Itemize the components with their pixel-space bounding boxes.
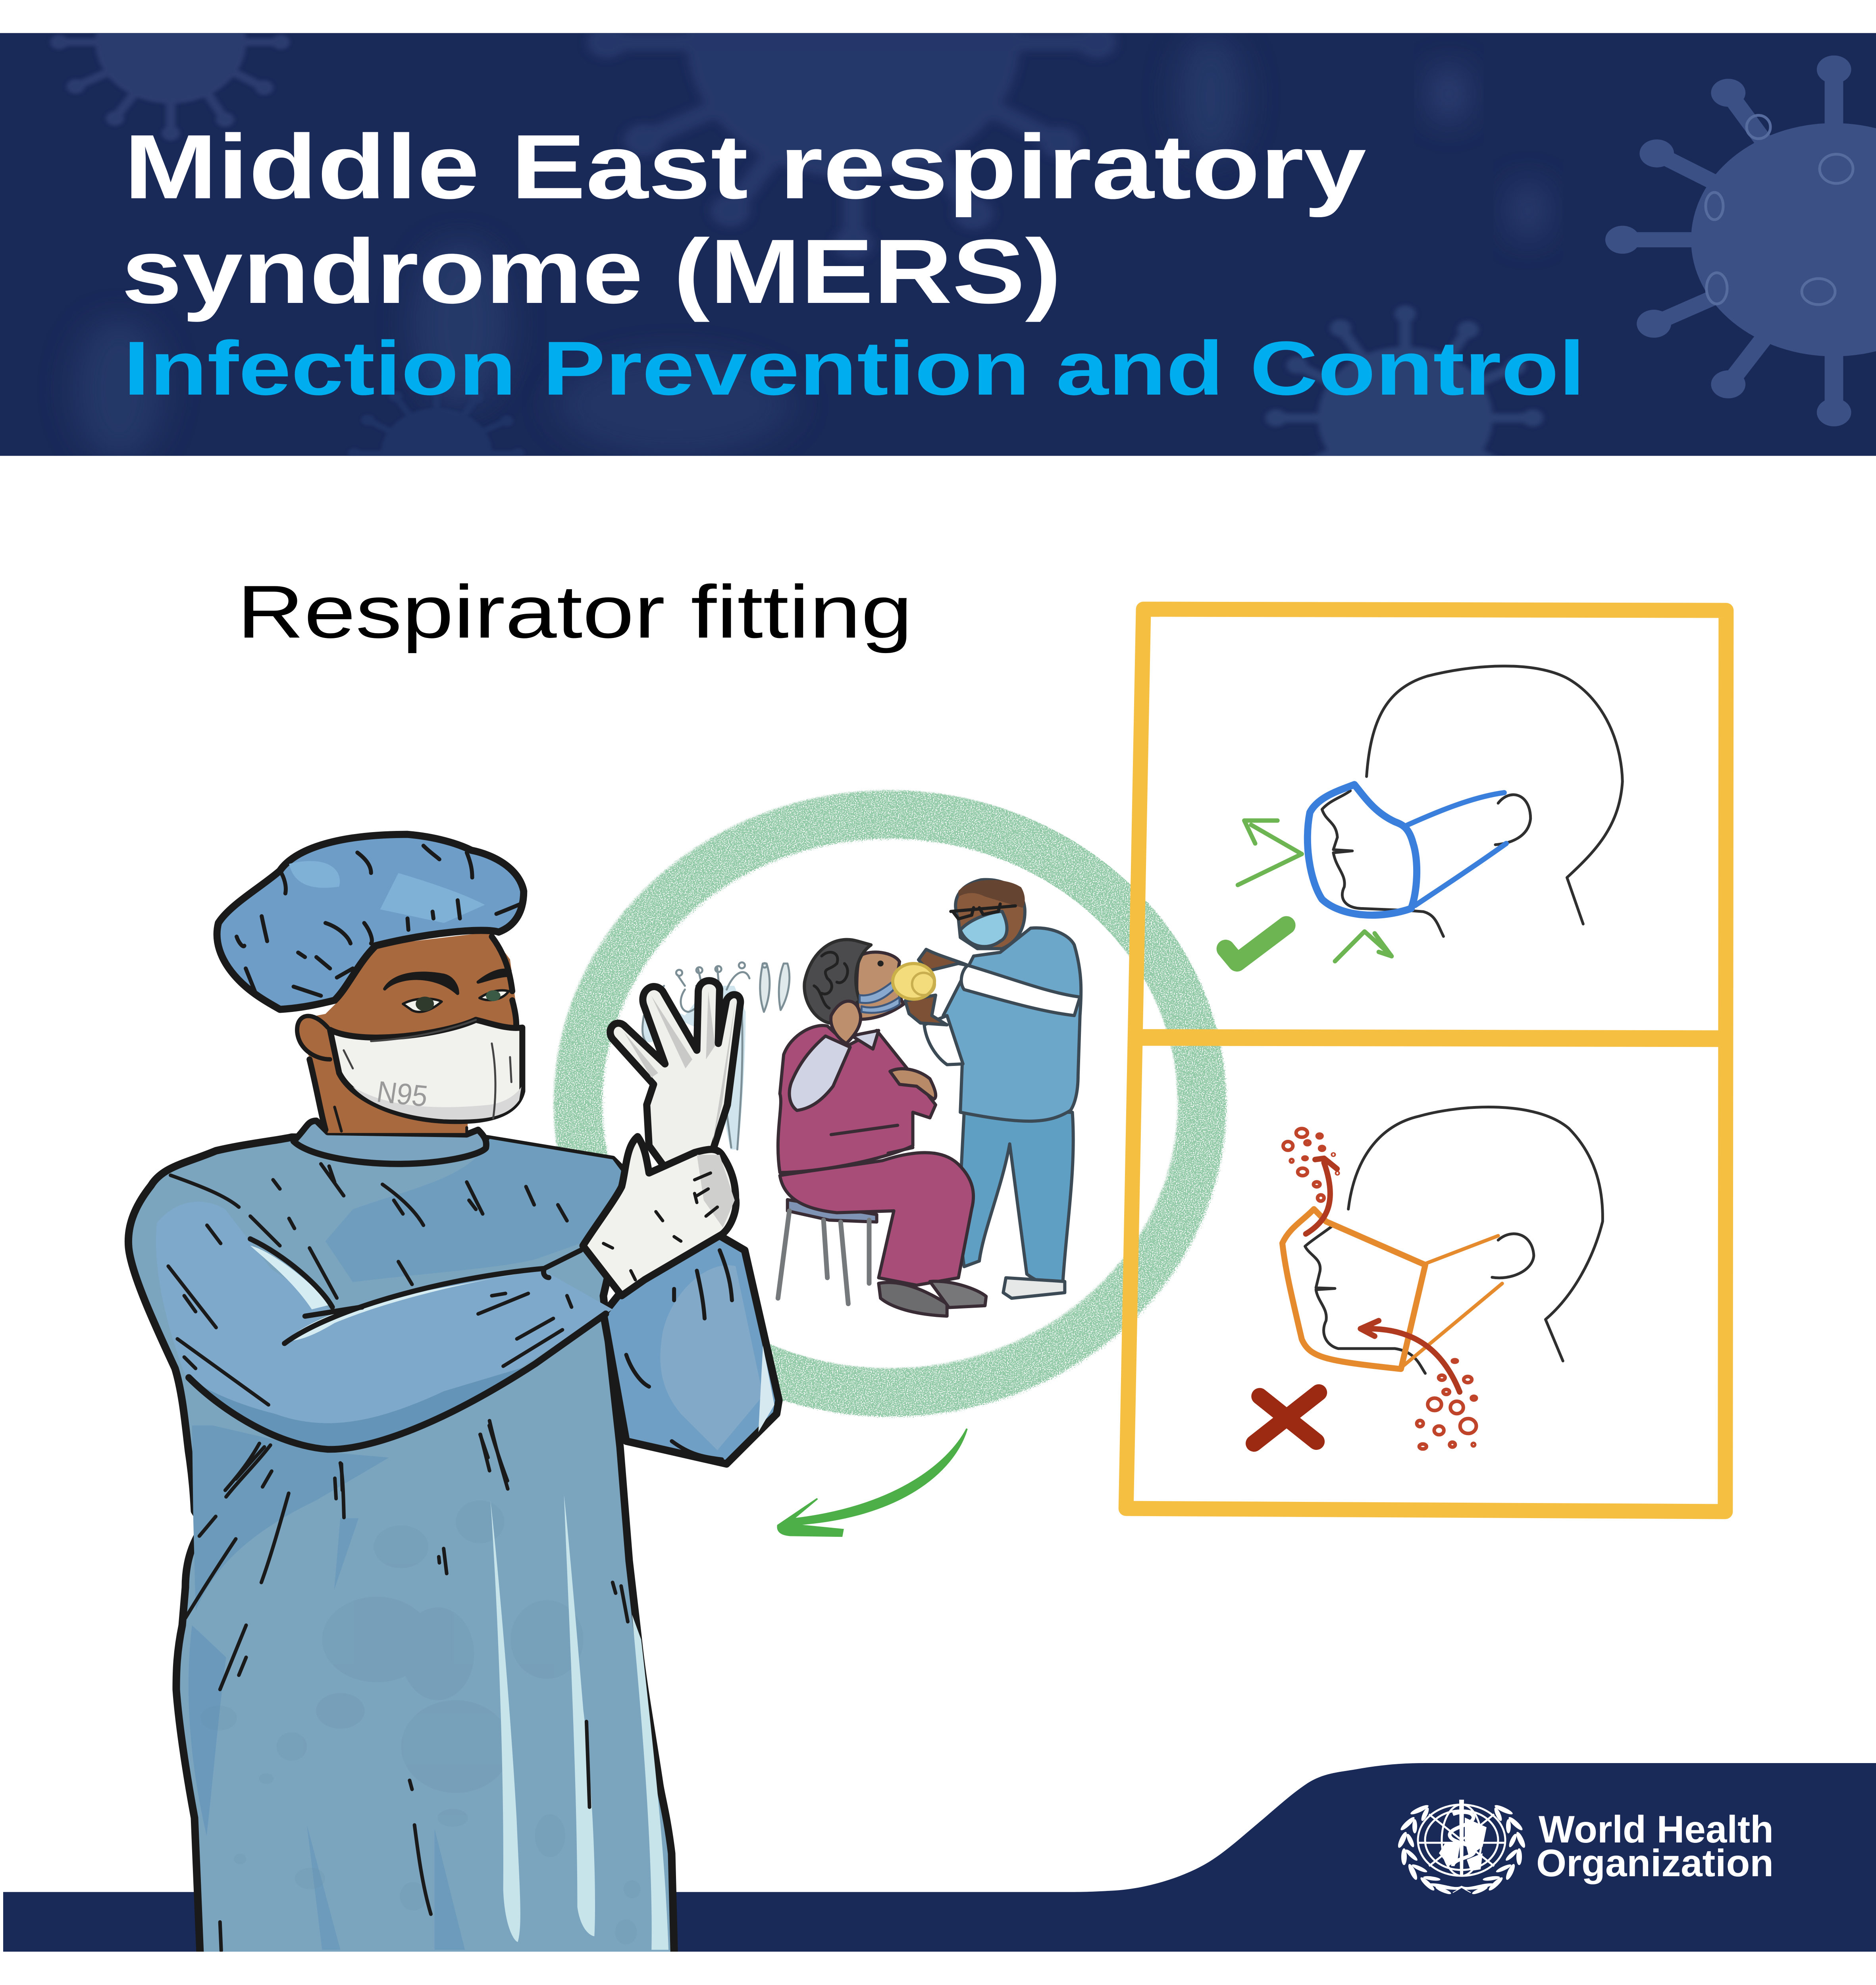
blue respirator [1308,784,1506,915]
subtitle: Infection Prevention and Control [123,326,1585,411]
green airflow arrows [1238,821,1392,961]
upper gown shading and arm [156,1139,626,1490]
title: Middle East respiratory [124,116,1367,218]
orange respirator [1282,1209,1502,1369]
droplets [1283,1129,1476,1449]
head outline [1322,666,1622,937]
healthcare worker in gown [128,834,779,1963]
gripping glove [583,1137,736,1296]
WHO wordmark: World Health [1539,1808,1774,1850]
green arrow [778,1429,967,1536]
header banner [0,33,1876,456]
fitting scene illustration [642,880,1081,1316]
yellow frame [1126,609,1726,1511]
heading: respirator fitting: Respirator fitting [237,570,913,653]
panel: poor fit [1254,1107,1602,1449]
raised glove [610,981,740,1171]
right sleeve [603,1234,779,1464]
WHO wordmark [1536,1808,1774,1884]
title [121,116,1367,323]
gown body [128,1137,674,1963]
large virus [1622,69,1876,412]
virus background pattern [59,0,1876,523]
footer band [3,1763,1876,1952]
head outline [1305,1107,1602,1373]
surgical cap [217,834,524,1009]
red leak arrows [1306,1158,1460,1392]
quality fit panels [1126,609,1726,1511]
check mark [1226,925,1287,962]
N95 label: N95 [375,1075,430,1113]
respirator [893,964,934,999]
cross mark [1254,1393,1319,1443]
title: syndrome (MERS) [121,220,1061,323]
gown shading and folds: lower [185,1426,668,1950]
WHO wordmark: Organization [1536,1842,1774,1884]
head and neck [217,834,524,1134]
green circle [578,814,1202,1392]
patient [778,940,986,1316]
gloved hands [583,981,740,1296]
WHO emblem [1396,1800,1527,1895]
WHO logo [1396,1800,1774,1895]
panel: correct fit [1226,666,1622,962]
eyes and brows [385,973,458,993]
nurse [905,880,1081,1298]
collar [294,1121,486,1164]
hanging respirators [642,962,790,1149]
N95 mask [330,1020,522,1121]
